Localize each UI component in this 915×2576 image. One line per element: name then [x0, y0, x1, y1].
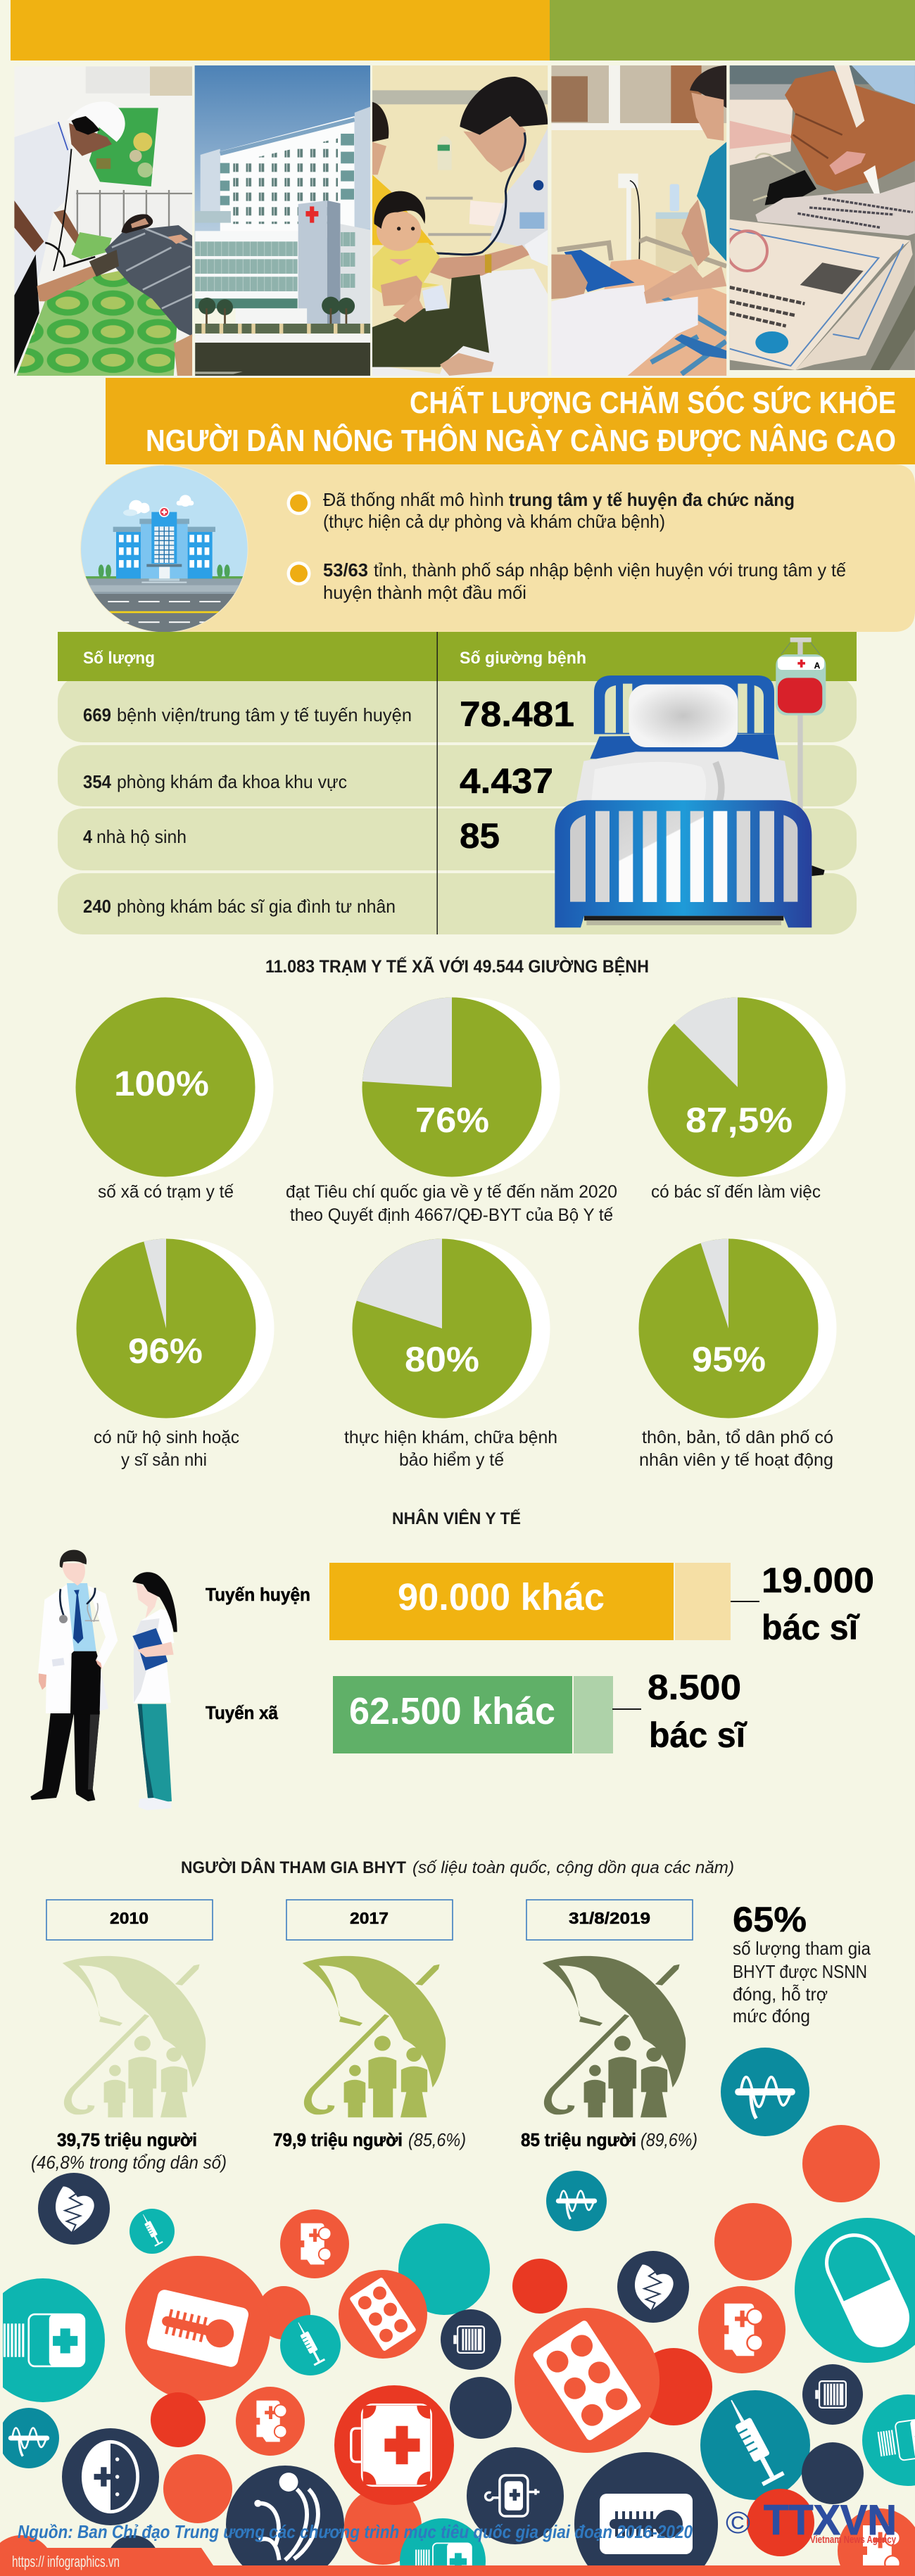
title banner	[106, 378, 915, 464]
text: bullet 1	[323, 489, 795, 532]
logo: TTXVN: TTXVN	[764, 2496, 897, 2544]
logo: TTXVN: ©	[726, 2506, 750, 2540]
bubble: thermometer navy	[574, 2452, 718, 2576]
table header	[58, 632, 857, 681]
bubble: bottle	[0, 2278, 105, 2402]
pie: 76%: 76%	[415, 1100, 489, 1140]
pie: 80%: bảo hiểm y tế	[399, 1450, 504, 1470]
callout: 65%: BHYT được NSNN	[733, 1961, 867, 1982]
photo: hospital building	[195, 65, 370, 376]
bubble: thermometer	[125, 2256, 270, 2401]
heading: health insurance participation	[181, 1858, 734, 1877]
pie: 96%: 96%	[128, 1331, 203, 1371]
label: district level: Tuyến huyện	[206, 1584, 310, 1605]
heading: medical staff: NHÂN VIÊN Y TẾ	[392, 1509, 521, 1528]
pie: 95%: 95%	[692, 1340, 766, 1379]
row: 354: phòng khám đa khoa khu vực	[117, 771, 347, 792]
photo: hand signing health insurance cards	[727, 65, 915, 370]
pie: 100%: 100%	[114, 1064, 209, 1103]
row: 240: 240	[83, 896, 111, 917]
pie: 95%: nhân viên y tế hoạt động	[639, 1450, 833, 1470]
decorative medical icon bubbles	[0, 2048, 915, 2576]
callout: 65%: đóng, hỗ trợ	[733, 1984, 828, 2005]
pie: 96%: có nữ hộ sinh hoặc	[94, 1428, 239, 1447]
table: facilities and beds	[58, 632, 857, 934]
pie: 87,5%	[648, 998, 846, 1202]
source line: Nguồn: Ban Chỉ đạo Trung ương các chương trình mục tiêu quốc gia giai đoạn 2016-2020	[18, 2521, 693, 2542]
pie: 95%: thôn, bản, tổ dân phố có	[642, 1428, 833, 1447]
bubble: battery	[441, 2309, 501, 2370]
pie: 80%: 80%	[405, 1340, 479, 1379]
bubble: battery 2	[802, 2364, 863, 2425]
bullet 1	[287, 491, 311, 515]
photo: nurse holding elderly patient's hands	[551, 65, 726, 376]
bubble: syringe small	[130, 2209, 175, 2254]
row: 669: 669	[83, 704, 111, 725]
text: bullet 1: Đã thống nhất mô hình	[323, 489, 504, 510]
icon: doctors	[30, 1550, 177, 1810]
panel: health centre summary	[80, 464, 915, 632]
heading: health insurance participation: (số liệu toàn quốc, cộng dồn qua các năm)	[412, 1858, 734, 1877]
bubble: ambulance bottom right	[838, 2508, 915, 2576]
table header: Số lượng	[83, 649, 155, 668]
text: bullet 2: 53/63	[323, 559, 368, 580]
figure: female nurse	[132, 1572, 177, 1810]
bubble: heart	[38, 2173, 110, 2245]
bubble: syringe large	[700, 2390, 810, 2500]
bar segment: 62.500 others	[333, 1676, 572, 1753]
pie: 87,5%: có bác sĩ đến làm việc	[651, 1182, 821, 1202]
pie: 96%: y sĩ sản nhi	[121, 1450, 207, 1470]
bullet 2	[287, 561, 311, 585]
pie: 87,5%: 87,5%	[686, 1100, 793, 1140]
bubble: ambulance	[280, 2209, 349, 2278]
row: 4: 4	[83, 826, 92, 847]
label: commune level: Tuyến xã	[206, 1702, 279, 1723]
bubble: pills large	[515, 2308, 660, 2453]
text: bullet 1: trung tâm y tế huyện đa chức năng	[509, 489, 795, 510]
column: 2017: (85,6%)	[408, 2129, 466, 2150]
value: 8.500 doctors	[648, 1668, 747, 1755]
value: 19.000 doctors: bác sĩ	[762, 1608, 860, 1647]
bubble: stethoscope	[226, 2466, 344, 2576]
icon: hospital bed with blood bag: A	[814, 661, 821, 671]
number: 85: 85	[460, 816, 500, 856]
column: 31/8/2019: (89,6%)	[640, 2129, 698, 2150]
pie: 76%	[286, 998, 617, 1225]
callout: 65%	[733, 1900, 871, 2026]
bar: district level	[206, 1561, 874, 1647]
text: bullet 2	[323, 559, 847, 603]
value: 19.000 doctors	[762, 1561, 874, 1647]
callout: 65%: 65%	[733, 1900, 807, 1939]
number: 4.437: 4.437	[460, 761, 553, 801]
bubble: ambulance 2	[698, 2286, 785, 2373]
bar segment: 90.000 others: 90.000 khác	[398, 1576, 605, 1618]
bubble: bottle bottom	[400, 2518, 486, 2576]
pie: 96%	[76, 1238, 274, 1470]
bubble: capsule	[795, 2218, 915, 2363]
pie: 100%	[76, 998, 273, 1202]
icon: umbrella and family, dark	[543, 1956, 686, 2117]
bar: commune level	[206, 1668, 747, 1755]
column: 31/8/2019: 31/8/2019	[569, 1909, 650, 1927]
callout: 65%: số lượng tham gia	[733, 1938, 871, 1959]
icon: umbrella and family, light	[63, 1956, 206, 2117]
value: 8.500 doctors: bác sĩ	[649, 1715, 747, 1755]
icon: hospital bed with blood bag	[555, 637, 826, 927]
table rows	[58, 675, 857, 934]
pie: 95%	[639, 1238, 836, 1470]
pie: 80%: thực hiện khám, chữa bệnh	[344, 1428, 557, 1447]
bubble: dna left	[0, 2408, 59, 2468]
number: 78.481: 78.481	[460, 694, 574, 734]
row: 240: phòng khám bác sĩ gia đình tư nhân	[117, 896, 396, 917]
column: 2017: 79,9 triệu người	[273, 2129, 403, 2150]
row: 4: nhà hộ sinh	[96, 826, 187, 847]
text: bullet 2: huyện thành một đầu mối	[323, 582, 526, 603]
column: 31/8/2019: 85 triệu người	[521, 2129, 636, 2150]
photo: doctor examining baby	[372, 65, 548, 376]
bar segment: 62.500 others: 62.500 khác	[349, 1690, 555, 1732]
pie: 100%: số xã có trạm y tế	[98, 1182, 234, 1202]
figure: male doctor	[30, 1550, 118, 1801]
bubble: syringe	[280, 2315, 341, 2375]
bubble: heart 2	[617, 2251, 689, 2323]
column: 31/8/2019	[521, 1900, 698, 2150]
column: 2017: 2017	[350, 1909, 389, 1927]
heading: commune health stations: 11.083 TRẠM Y TẾ XÃ VỚI 49.544 GIƯỜNG BỆNH	[265, 956, 649, 977]
value: 19.000 doctors: 19.000	[762, 1561, 874, 1600]
icon: umbrella and family, medium	[303, 1956, 446, 2117]
column: 2010: 39,75 triệu người	[57, 2129, 197, 2150]
value: 8.500 doctors: 8.500	[648, 1668, 741, 1707]
photo strip	[14, 65, 915, 376]
column: 2010: (46,8% trong tổng dân số)	[31, 2152, 227, 2173]
text: bullet 2: tỉnh, thành phố sáp nhập bệnh viện huyện với trung tâm y tế	[374, 559, 847, 580]
callout: 65%: mức đóng	[733, 2005, 810, 2026]
panel background	[164, 464, 915, 632]
text: bullet 1: (thực hiện cả dự phòng và khám chữa bệnh)	[323, 511, 665, 532]
top colour band	[11, 0, 915, 61]
bubble: dna	[546, 2171, 607, 2231]
icon: hospital in circle	[80, 464, 248, 632]
row: 669: bệnh viện/trung tâm y tế tuyến huyện	[117, 704, 412, 725]
pie: 80%	[344, 1238, 557, 1470]
bar segment: 90.000 others	[329, 1563, 674, 1640]
bubble: pills	[339, 2270, 427, 2359]
footer url: https:// infographics.vn	[12, 2553, 120, 2570]
bar segment: doctors	[675, 1563, 731, 1640]
column: 2010	[31, 1900, 227, 2173]
bubble: ambulance 3	[236, 2387, 305, 2456]
column: 2017	[273, 1900, 466, 2150]
bar segment: doctors	[574, 1676, 613, 1753]
column: 2010: 2010	[110, 1909, 149, 1927]
pie: 76%: đạt Tiêu chí quốc gia về y tế đến năm 2020	[286, 1182, 617, 1202]
bubble: pump	[467, 2447, 564, 2544]
bubble: bottle right	[862, 2394, 915, 2486]
heading: health insurance participation: NGƯỜI DÂN THAM GIA BHYT	[181, 1858, 406, 1877]
pie: 76%: theo Quyết định 4667/QĐ-BYT của Bộ Y tế	[290, 1205, 613, 1225]
table header: Số giường bệnh	[460, 649, 586, 668]
bubble: door icon	[62, 2428, 159, 2525]
bubble: first aid kit	[334, 2385, 454, 2505]
footer band	[0, 2548, 915, 2576]
row: 354: 354	[83, 771, 111, 792]
bubble: dna large	[721, 2048, 809, 2136]
photo: doctor checking patient's blood pressure	[14, 66, 192, 376]
